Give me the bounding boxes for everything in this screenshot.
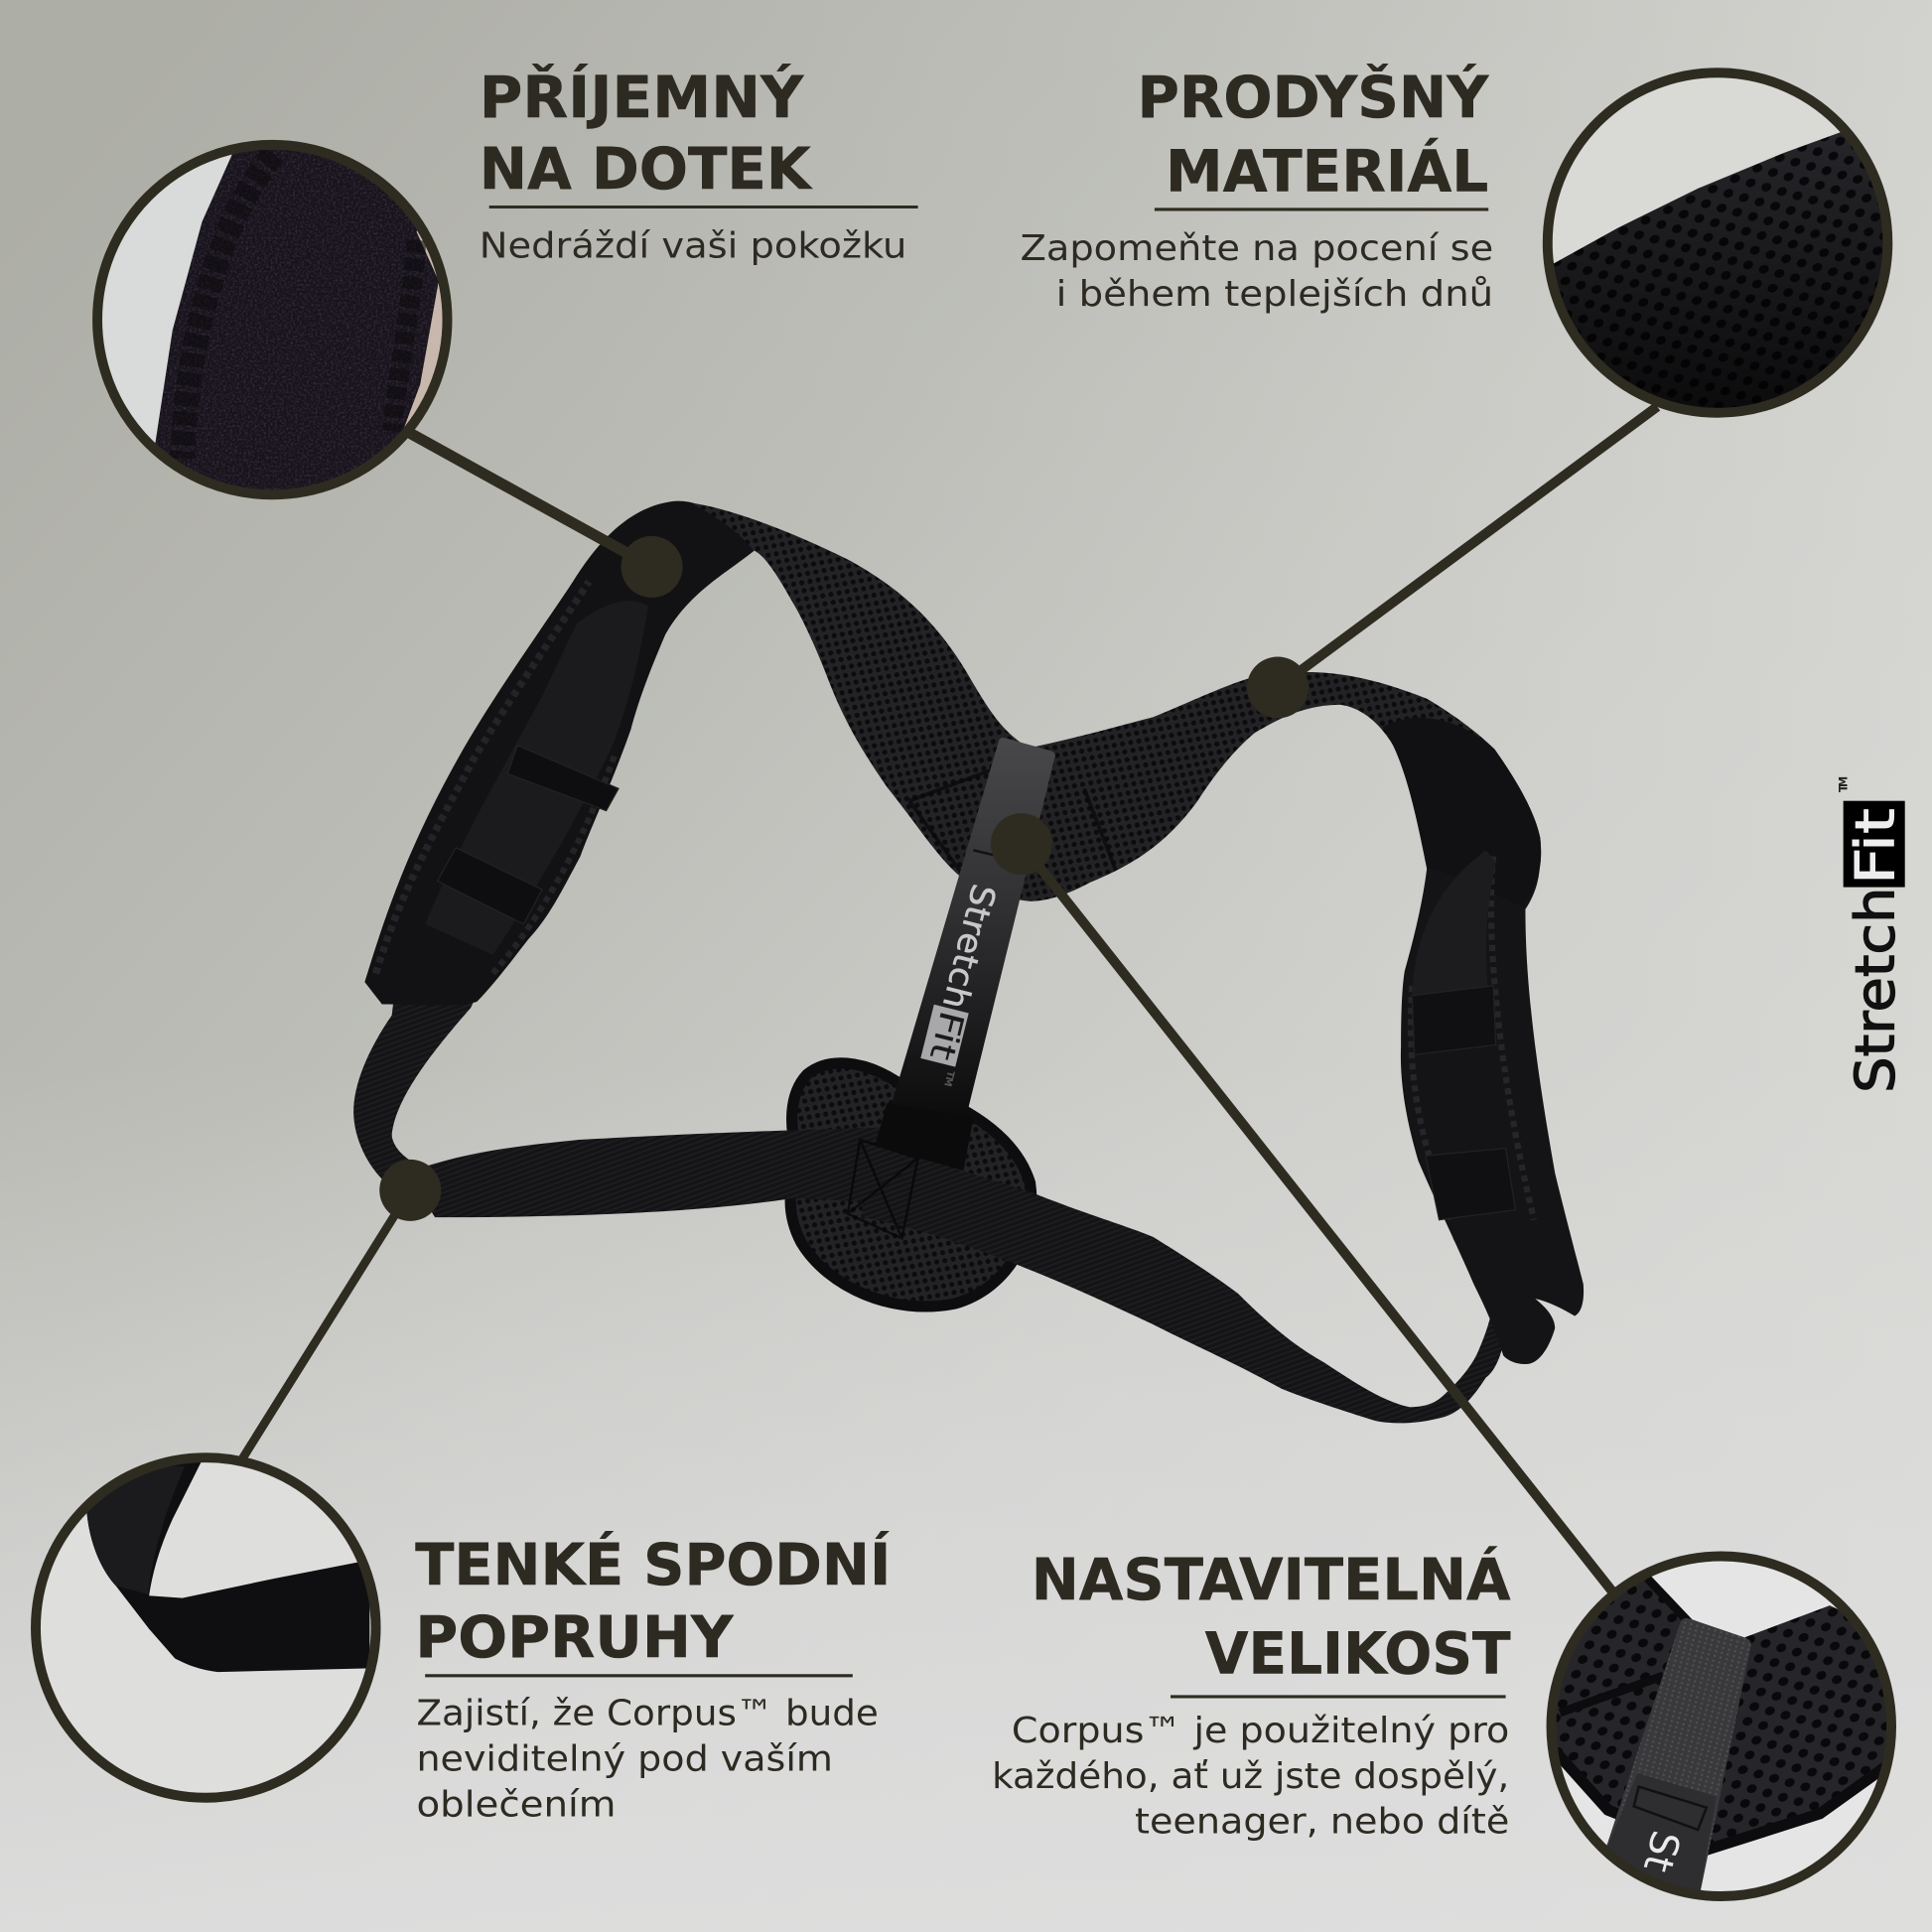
left strap stitched edge — [376, 582, 589, 973]
tag close-up text: St — [1634, 1826, 1688, 1876]
description: Zajistí, že Corpus™ bude — [416, 1693, 879, 1733]
connector line: soft touch — [407, 431, 652, 567]
callout: thin lower straps — [415, 1530, 891, 1825]
right padded strap — [1401, 813, 1584, 1364]
left padded shoulder strap — [364, 501, 755, 1006]
brand logo: StretchFit: Fit — [1844, 808, 1907, 885]
connector line: thin straps — [241, 1190, 410, 1460]
heading — [1138, 63, 1489, 205]
brand logo: StretchFit: TM — [1837, 776, 1850, 792]
horizontal webbing strap — [407, 1128, 901, 1217]
callout: soft to the touch — [480, 63, 918, 266]
StretchFit tag — [875, 738, 1055, 1171]
heading: PRODYŠNÝ — [1138, 63, 1489, 131]
description: neviditelný pod vaším — [416, 1738, 833, 1779]
detail circle: adjustable tag — [1547, 1551, 1896, 1901]
left strap inner webbing — [425, 601, 648, 955]
tag logo text — [915, 881, 1004, 1088]
description — [1021, 228, 1493, 315]
right strap stitched edges — [1411, 857, 1534, 1220]
heading: POPRUHY — [415, 1603, 734, 1671]
crossed stitch box — [848, 1140, 918, 1238]
tag logo text: Stretch — [935, 881, 1004, 1013]
heading: TENKÉ SPODNÍ — [415, 1530, 891, 1598]
heading: NA DOTEK — [480, 135, 812, 203]
marker dot: adjustable size — [991, 813, 1052, 875]
oval back pad — [790, 1063, 1032, 1307]
description: oblečením — [416, 1784, 617, 1825]
heading: NASTAVITELNÁ — [1032, 1545, 1511, 1613]
right pad upper neoprene — [1382, 718, 1541, 906]
heading: PŘÍJEMNÝ — [480, 63, 804, 131]
marker dot: breathable material — [1247, 656, 1309, 719]
tag logo text: TM — [941, 1069, 956, 1088]
right strap inner webbing — [1412, 850, 1496, 996]
description: každého, ať už jste dospělý, — [992, 1756, 1509, 1797]
description: Zapomeňte na pocení se — [1021, 228, 1493, 269]
product photo: posture corrector harness — [353, 501, 1584, 1423]
left strap slider loops — [438, 746, 619, 924]
description: teenager, nebo dítě — [1135, 1802, 1509, 1843]
detail circle: thin webbing — [31, 1452, 381, 1803]
heading: MATERIÁL — [1166, 136, 1488, 205]
heading: VELIKOST — [1205, 1619, 1511, 1687]
marker dot: soft touch — [621, 536, 683, 598]
callout: adjustable size — [992, 1545, 1511, 1843]
connector line: adjustable size — [1022, 844, 1616, 1596]
detail circle: soft fabric — [92, 139, 453, 500]
thin left webbing loop — [353, 961, 492, 1180]
detail circle: breathable mesh — [1543, 68, 1892, 418]
heading — [415, 1530, 891, 1671]
description: i během teplejších dnů — [1056, 274, 1493, 315]
description — [416, 1694, 879, 1825]
description: Nedráždí vaši pokožku — [480, 225, 906, 266]
callout: breathable material — [1021, 63, 1493, 315]
marker dot: thin straps — [379, 1160, 441, 1221]
connector line: breathable material — [1278, 407, 1657, 688]
description — [992, 1711, 1509, 1843]
heading — [480, 63, 812, 203]
brand logo: StretchFit: Stretch — [1844, 888, 1907, 1093]
right strap slider loops — [1412, 986, 1516, 1220]
lower diagonal webbing strap — [863, 1140, 1506, 1423]
brand logo: StretchFit — [1837, 776, 1907, 1093]
mesh band seam — [909, 766, 1115, 873]
heading — [1032, 1545, 1511, 1687]
description: Corpus™ je použitelný pro — [1012, 1711, 1509, 1751]
central mesh band — [690, 502, 1541, 906]
tag logo text: Fit — [922, 1007, 972, 1064]
